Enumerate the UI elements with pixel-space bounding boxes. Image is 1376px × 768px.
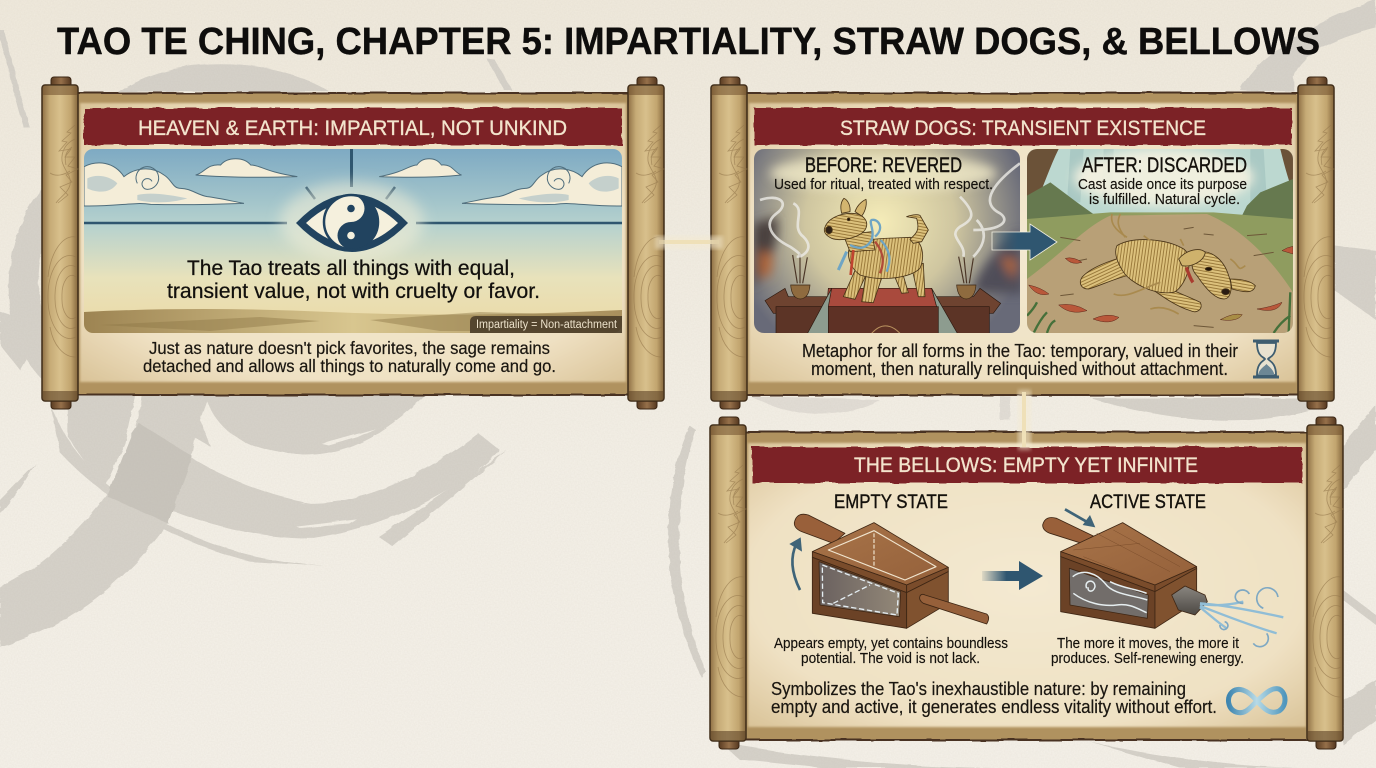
arrow: empty to active bbox=[982, 561, 1043, 590]
statement text: The Tao treats all things with equal, bbox=[187, 256, 515, 280]
ground bbox=[84, 309, 622, 333]
illustration: empty bellows bbox=[789, 514, 989, 628]
tag: impartiality equals non-attachment bbox=[470, 316, 622, 333]
caption: empty state: Appears empty, yet contains boundless bbox=[774, 635, 1008, 652]
panel: heaven and earth scroll bbox=[42, 77, 664, 409]
description text: detached and allows all things to naturally come and go. bbox=[143, 356, 556, 376]
icon: infinity bbox=[1229, 689, 1285, 713]
panel: the bellows scroll bbox=[710, 417, 1343, 749]
caption: after: Cast aside once its purpose bbox=[1078, 176, 1247, 193]
illustration: sky and horizon bbox=[84, 149, 622, 333]
left roller bbox=[710, 417, 746, 749]
illustration: before, revered bbox=[753, 149, 1023, 335]
heading: active state: ACTIVE STATE bbox=[1090, 491, 1206, 513]
caption: before: Used for ritual, treated with respect. bbox=[774, 176, 993, 193]
heading: empty state: EMPTY STATE bbox=[834, 491, 948, 513]
incense burners and smoke bbox=[760, 163, 1020, 299]
statement text: transient value, not with cruelty or favor. bbox=[167, 279, 540, 303]
description text: moment, then naturally relinquished without attachment. bbox=[811, 358, 1228, 379]
left roller bbox=[711, 77, 747, 409]
tag: impartiality equals non-attachment: Impartiality = Non-attachment bbox=[476, 319, 618, 331]
description text bbox=[802, 340, 1238, 379]
ribbons bbox=[838, 220, 889, 275]
scroll paper bbox=[743, 93, 1302, 395]
caption: active state bbox=[1051, 635, 1244, 667]
banner: THE BELLOWS: EMPTY YET INFINITE bbox=[854, 454, 1198, 477]
description text: Just as nature doesn't pick favorites, the sage remains bbox=[149, 338, 550, 358]
left clouds bbox=[84, 159, 297, 206]
illustration: after, discarded bbox=[1027, 149, 1293, 333]
right roller bbox=[1307, 417, 1343, 749]
caption: after bbox=[1078, 176, 1247, 208]
altar bbox=[765, 288, 1001, 335]
caption: empty state bbox=[774, 635, 1008, 667]
heading: after: AFTER: DISCARDED bbox=[1082, 154, 1247, 177]
banner: STRAW DOGS: TRANSIENT EXISTENCE bbox=[840, 117, 1206, 140]
icon: yin-yang eye with rays bbox=[280, 149, 424, 262]
straw dog upright bbox=[824, 198, 928, 303]
banner bbox=[752, 447, 1302, 483]
illustration: active bellows bbox=[1043, 509, 1283, 647]
scroll paper bbox=[742, 432, 1312, 740]
caption: active state: produces. Self-renewing energy. bbox=[1051, 650, 1244, 667]
scroll paper bbox=[74, 93, 632, 395]
description text bbox=[771, 678, 1217, 717]
caption: active state: The more it moves, the more it bbox=[1057, 635, 1240, 652]
straw dog collapsed bbox=[1080, 240, 1255, 312]
description text: Symbolizes the Tao's inexhaustible nature: by remaining bbox=[771, 678, 1186, 699]
connector: panel 2 to panel 3 bbox=[1018, 390, 1031, 450]
statement text bbox=[167, 256, 540, 303]
caption: empty state: potential. The void is not lack. bbox=[801, 650, 980, 667]
panel: straw dogs scroll bbox=[711, 77, 1334, 409]
arrow: before to after bbox=[992, 224, 1057, 260]
connector: panel 1 to panel 2 bbox=[655, 236, 723, 249]
banner bbox=[84, 108, 622, 145]
description text: empty and active, it generates endless vitality without effort. bbox=[771, 696, 1217, 717]
left roller bbox=[42, 77, 78, 409]
right clouds bbox=[379, 159, 622, 206]
description text: Metaphor for all forms in the Tao: temporary, valued in their bbox=[802, 340, 1238, 361]
right roller bbox=[628, 77, 664, 409]
banner bbox=[754, 108, 1292, 145]
description text bbox=[143, 338, 556, 376]
banner: HEAVEN & EARTH: IMPARTIAL, NOT UNKIND bbox=[138, 117, 567, 140]
caption: after: is fulfilled. Natural cycle. bbox=[1089, 191, 1240, 208]
dark surroundings bbox=[753, 217, 1023, 293]
icon: hourglass bbox=[1253, 341, 1279, 377]
heading: before: BEFORE: REVERED bbox=[805, 154, 962, 177]
right roller bbox=[1298, 77, 1334, 409]
fallen leaves bbox=[1029, 246, 1293, 322]
title: TAO TE CHING, CHAPTER 5: IMPARTIALITY, STRAW DOGS, & BELLOWS bbox=[57, 21, 1320, 63]
